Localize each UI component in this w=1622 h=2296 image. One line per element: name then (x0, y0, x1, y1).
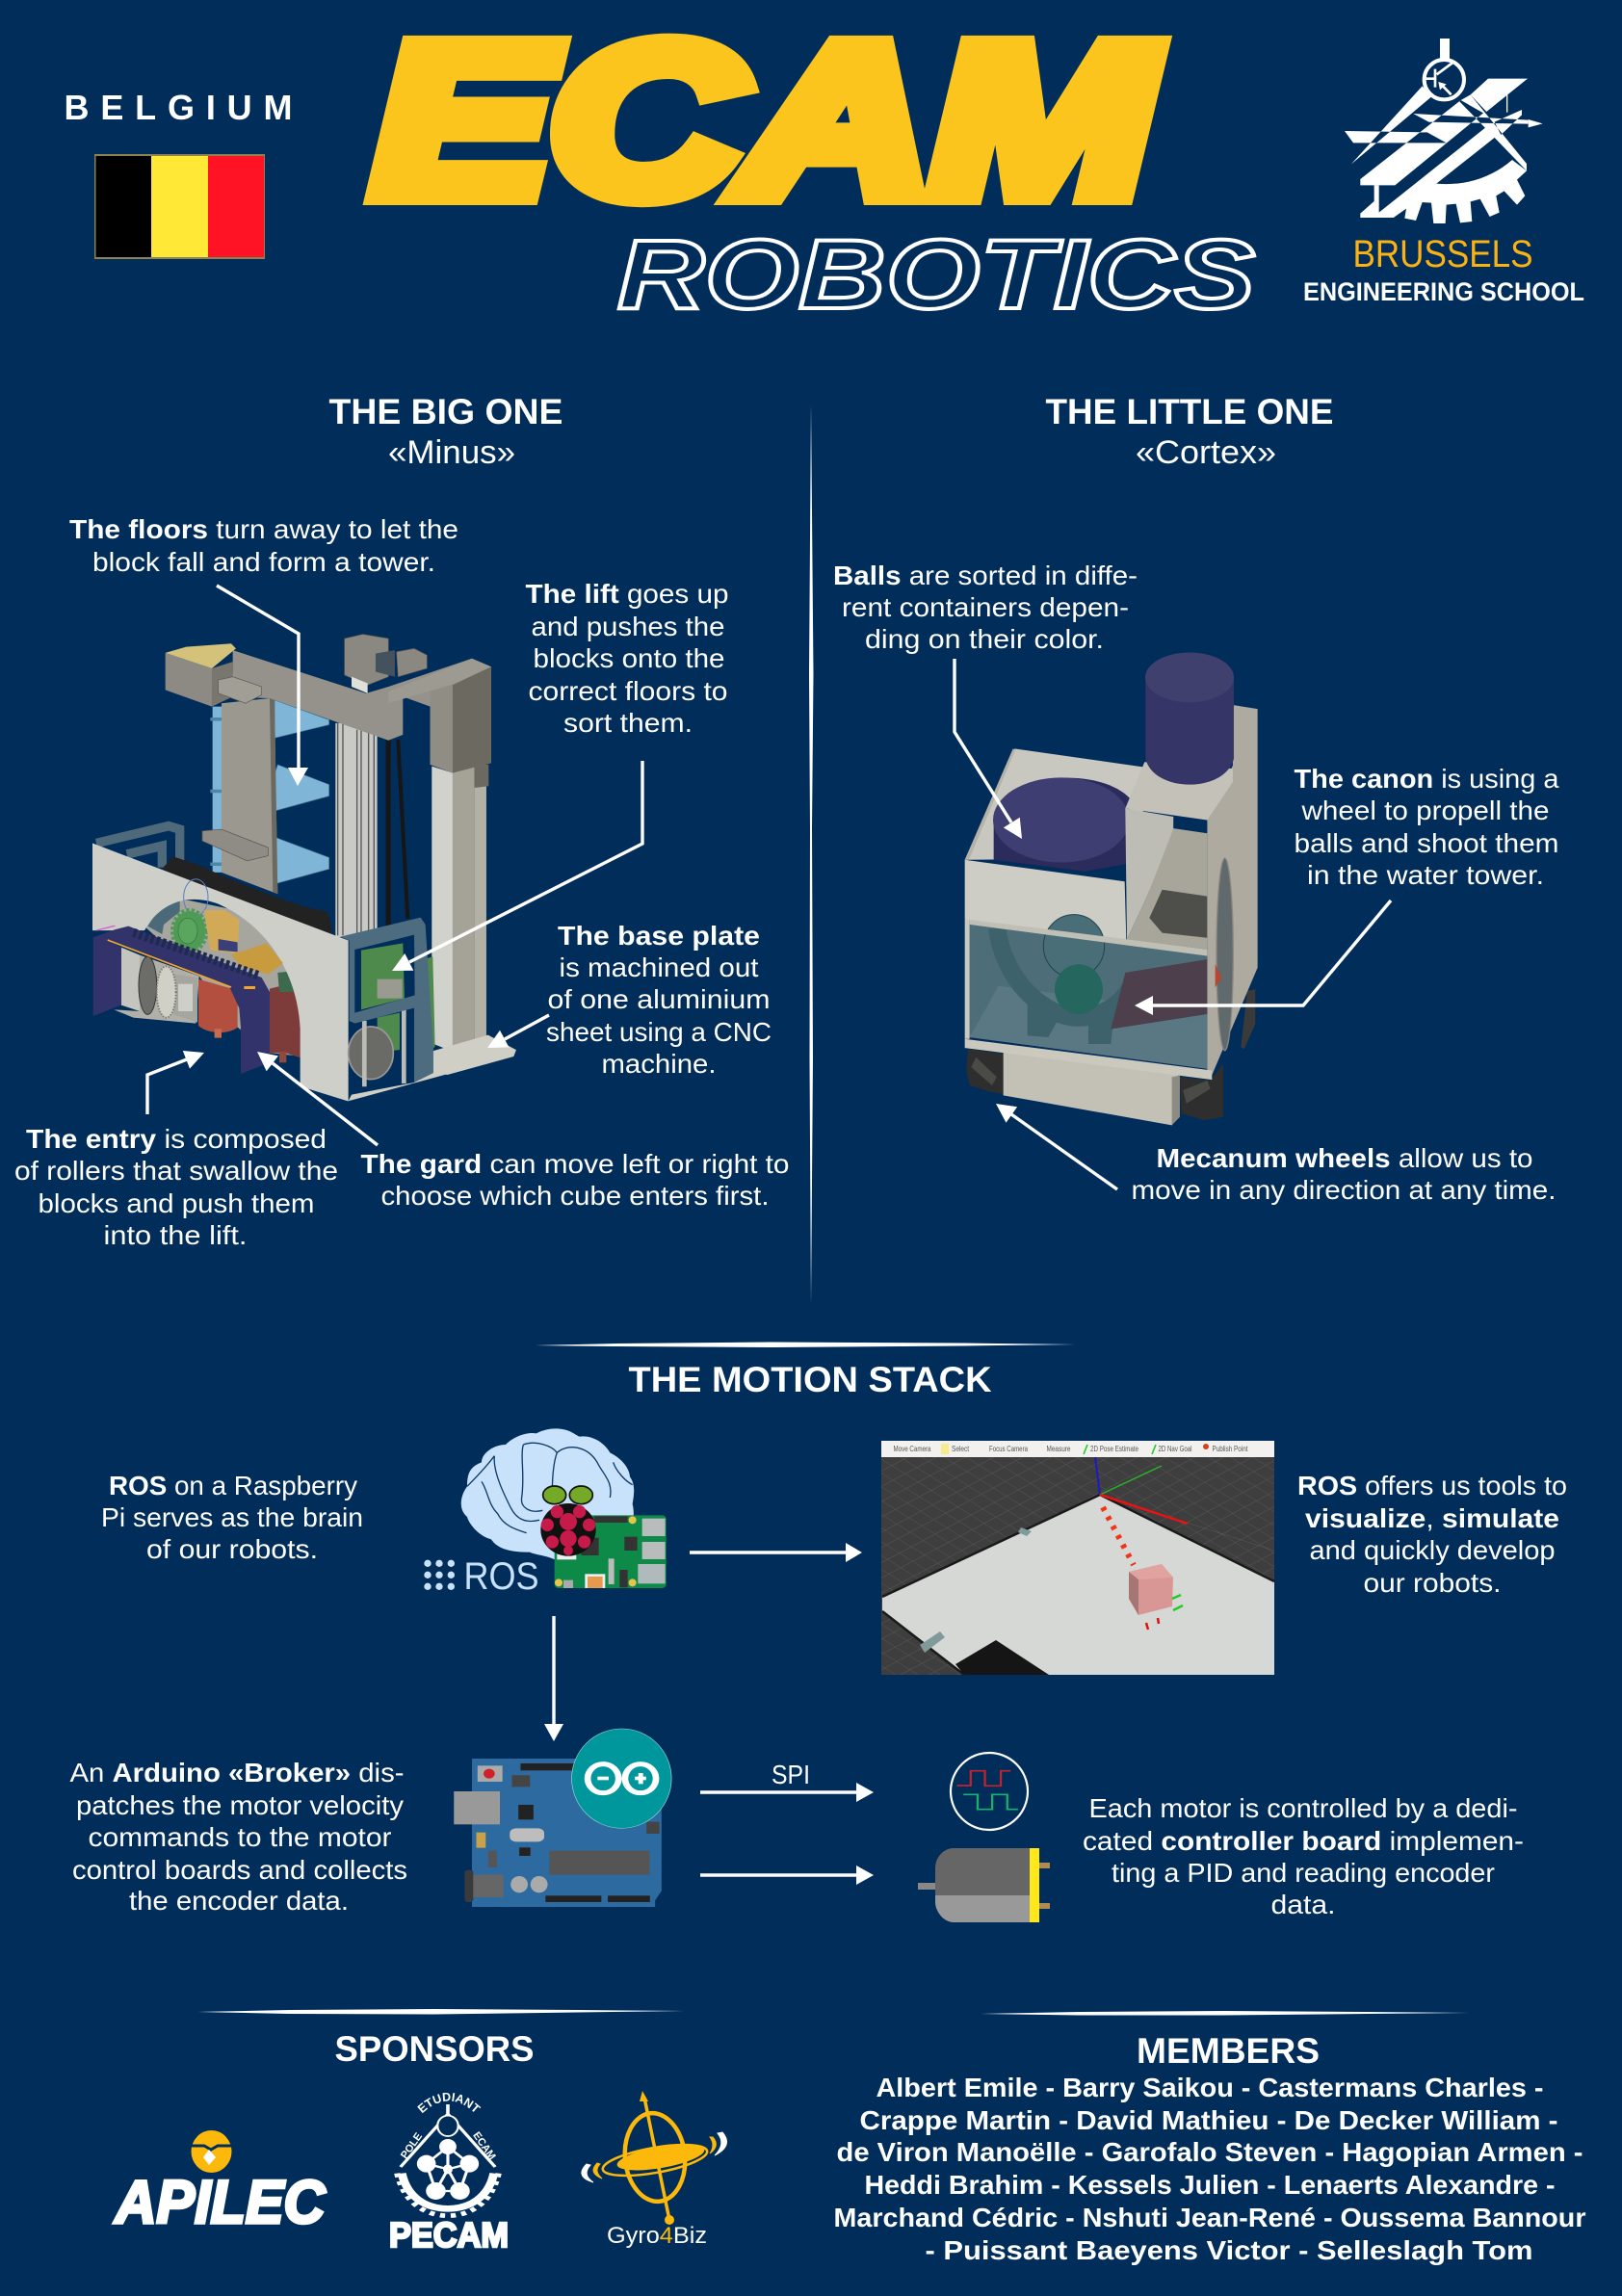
label: Belgium: BELGIUM (64, 88, 293, 127)
heading: The Big One: «Minus» (388, 434, 515, 471)
text: the canon: The canon is using a (1295, 764, 1559, 794)
wheels (966, 1049, 1004, 1094)
arrow: balls (955, 659, 1022, 839)
text: Arduino broker: the encoder data. (129, 1886, 349, 1916)
rail (335, 723, 378, 937)
text: members list: Marchand Cédric - Nshuti Jean-René - Oussema Bannour (834, 2203, 1586, 2232)
arrow: to rviz (690, 1543, 862, 1562)
text: balls: Balls are sorted in diffe- (833, 561, 1138, 590)
shelves (970, 920, 1207, 956)
logo: Brussels Engineering School: BRUSSELS (1352, 233, 1533, 275)
front frame and inner parts (361, 943, 405, 1009)
text: the entry: blocks and push them (39, 1188, 314, 1218)
text: ROS offers tools: and quickly develop (1310, 1535, 1555, 1565)
text: the floors: block fall and form a tower. (92, 547, 435, 577)
text: the canon (1295, 764, 1559, 890)
arrow: gard (257, 1052, 378, 1145)
purple gate (93, 926, 270, 1074)
divider: motion stack brush stroke (535, 1343, 1076, 1347)
text: members list (834, 2073, 1586, 2265)
icon: signal waveform (951, 1753, 1028, 1830)
text: ROS on Raspberry Pi: ROS on a Raspberry (109, 1471, 357, 1500)
text: Arduino broker: commands to the motor (89, 1822, 391, 1852)
arrow: mecanum wheels (996, 1104, 1117, 1189)
raspberry logo (543, 1486, 566, 1504)
divider: vertical brush stroke (809, 404, 813, 1305)
text: the canon: balls and shoot them (1295, 828, 1558, 858)
logo: Brussels Engineering School: ENGINEERING SCHOOL (1303, 277, 1584, 306)
arrow: to motor (700, 1866, 874, 1885)
ros dots (424, 1560, 455, 1590)
heading: The Little One (1046, 391, 1333, 471)
text: base plate: machine. (601, 1049, 717, 1079)
base plate (433, 1035, 516, 1075)
wall (92, 844, 349, 1101)
text: the canon: wheel to propell the (1300, 796, 1549, 825)
text: motor controller: Each motor is controlled by a dedi- (1088, 1793, 1518, 1823)
text: the lift: sort them. (563, 708, 693, 738)
text: the lift: and pushes the (532, 612, 724, 641)
text: motor controller: ting a PID and reading encoder (1112, 1858, 1495, 1888)
text: Arduino broker: control boards and collects (72, 1855, 407, 1885)
lower transparent (970, 925, 1207, 1069)
text: base plate: The base plate (558, 921, 760, 951)
text: members list: de Viron Manoëlle - Garofalo Steven - Hagopian Armen - (836, 2137, 1583, 2167)
raspberry pi board (555, 1515, 667, 1588)
arrow: lift (392, 761, 642, 971)
text: Arduino broker: patches the motor velocity (76, 1790, 404, 1820)
text: ROS on Raspberry Pi: of our robots. (146, 1534, 318, 1564)
text: base plate: of one aluminium (547, 984, 771, 1014)
gear and motors (173, 911, 205, 951)
heading: The Motion Stack: THE MOTION STACK (628, 1359, 992, 1399)
canister (1145, 677, 1234, 785)
logo: Brussels Engineering School (1303, 39, 1584, 306)
back column (432, 767, 453, 1052)
text: mecanum wheels: move in any direction at any time. (1131, 1175, 1557, 1205)
heading: The Big One: THE BIG ONE (329, 391, 562, 431)
text: motor controller: data. (1271, 1890, 1335, 1919)
heading: Members: MEMBERS (1137, 2030, 1320, 2071)
text: the gard (360, 1149, 790, 1211)
logo: Pecam: ECAM (470, 2130, 498, 2162)
text: balls (833, 561, 1138, 654)
heading: The Little One: «Cortex» (1136, 434, 1276, 471)
screenshot: rviz simulation: Measure (1046, 1445, 1071, 1453)
divider: members brush stroke (981, 2011, 1469, 2015)
arrow: canon (1135, 900, 1391, 1015)
text: the lift (526, 579, 728, 738)
logo: Pecam: PECAM (389, 2215, 509, 2255)
text: the lift: The lift goes up (526, 579, 728, 609)
text: members list: - Puissant Baeyens Victor - Selleslagh Tom (925, 2235, 1533, 2265)
text: the floors: The floors turn away to let the (69, 514, 458, 544)
text: the lift: blocks onto the (534, 643, 724, 673)
rollers (164, 856, 332, 936)
logo: Pecam: ETUDIANT (417, 2093, 482, 2113)
text: ROS offers tools: visualize , simulate (1305, 1503, 1559, 1533)
arrow: entry (147, 1051, 204, 1114)
side wall (1207, 705, 1258, 1079)
icon: Belgian flag (94, 154, 265, 259)
text: Arduino broker: An Arduino «Broker» dis- (69, 1758, 405, 1787)
label: SPI: SPI (772, 1760, 810, 1789)
heading: The Big One (329, 391, 562, 471)
divider: sponsors brush stroke (197, 2009, 685, 2015)
text: ROS offers tools: our robots. (1364, 1568, 1501, 1598)
far wheel (1241, 989, 1255, 1049)
text: the lift: correct floors to (528, 676, 728, 706)
arrow: SPI (700, 1783, 874, 1802)
text: ROS on Raspberry Pi: Pi serves as the brain (101, 1502, 363, 1532)
heading: The Little One: THE LITTLE ONE (1046, 391, 1333, 431)
screenshot: rviz simulation: Focus Camera (989, 1445, 1028, 1453)
logo: Gyro4Biz: Gyro4Biz (607, 2223, 707, 2249)
text: base plate: sheet using a CNC (546, 1017, 772, 1047)
logo: Pecam: POLE (399, 2131, 425, 2161)
text: ROS offers tools (1297, 1471, 1567, 1598)
arrow: down to Arduino (544, 1616, 563, 1741)
bin back (965, 748, 1143, 860)
text: mecanum wheels (1131, 1143, 1557, 1205)
text: Arduino broker (69, 1758, 407, 1916)
text: the gard: choose which cube enters first. (381, 1181, 769, 1211)
illustration: little robot Cortex (965, 653, 1258, 1125)
screenshot: rviz simulation: Publish Point (1212, 1445, 1248, 1453)
text: mecanum wheels: Mecanum wheels allow us to (1156, 1143, 1533, 1173)
screenshot: rviz simulation: Select (952, 1445, 970, 1453)
front panel (965, 860, 1126, 939)
text: the entry: of rollers that swallow the (14, 1156, 338, 1186)
icon: DC motor (918, 1848, 1050, 1922)
logo: Pecam (389, 2093, 509, 2255)
logo: Gyro4Biz (582, 2091, 726, 2249)
base block (1004, 1046, 1178, 1125)
heading: Sponsors: SPONSORS (335, 2028, 534, 2069)
title: ECAM: ECAM (374, 0, 1157, 241)
illustration: big robot Minus (92, 635, 516, 1101)
screenshot: rviz simulation: 2D Pose Estimate (1090, 1445, 1138, 1453)
screenshot: rviz simulation (881, 1441, 1274, 1675)
text: the entry (14, 1124, 338, 1250)
text: motor controller: cated controller board implemen- (1083, 1826, 1524, 1856)
logo: Apilec (114, 2130, 327, 2236)
blue floors (275, 700, 329, 884)
belts (386, 740, 391, 926)
text: ROS on Raspberry Pi (101, 1471, 363, 1564)
arrow: floors (217, 586, 308, 786)
text: balls: ding on their color. (865, 624, 1104, 654)
arch interior (146, 900, 301, 1057)
text: the gard: The gard can move left or right to (360, 1149, 790, 1179)
funnel (994, 778, 1130, 872)
text: the floors (69, 514, 458, 577)
text: the entry: into the lift. (104, 1220, 247, 1250)
text: ROS offers tools: ROS offers us tools to (1297, 1471, 1567, 1500)
icon: brain with ROS and Raspberry Pi: ROS (464, 1555, 539, 1598)
text: members list: Heddi Brahim - Kessels Julien - Lenaerts Alexandre - (865, 2170, 1555, 2200)
icon: Arduino board (454, 1729, 671, 1907)
back frame (96, 826, 180, 873)
arrow: base plate (487, 1015, 549, 1048)
subtitle: Robotics: ROBOTICS (617, 220, 1255, 329)
text: the canon: in the water tower. (1307, 860, 1544, 890)
lower left interior (120, 947, 140, 1011)
text: motor controller (1083, 1793, 1524, 1919)
text: base plate (546, 921, 772, 1079)
tower (1125, 762, 1233, 820)
icon: brain with ROS and Raspberry Pi (424, 1428, 667, 1598)
screenshot: rviz simulation: Move Camera (894, 1445, 931, 1453)
text: balls: rent containers depen- (842, 592, 1129, 622)
text: the entry: The entry is composed (26, 1124, 327, 1154)
text: members list: Albert Emile - Barry Saikou - Castermans Charles - (876, 2073, 1543, 2102)
logo: Apilec: APILEC (114, 2169, 327, 2236)
screenshot: rviz simulation: 2D Nav Goal (1158, 1445, 1192, 1453)
text: base plate: is machined out (559, 952, 759, 982)
top structure (345, 635, 388, 685)
text: members list: Crappe Martin - David Mathieu - De Decker William - (859, 2105, 1558, 2135)
Arduino logo (572, 1729, 671, 1828)
